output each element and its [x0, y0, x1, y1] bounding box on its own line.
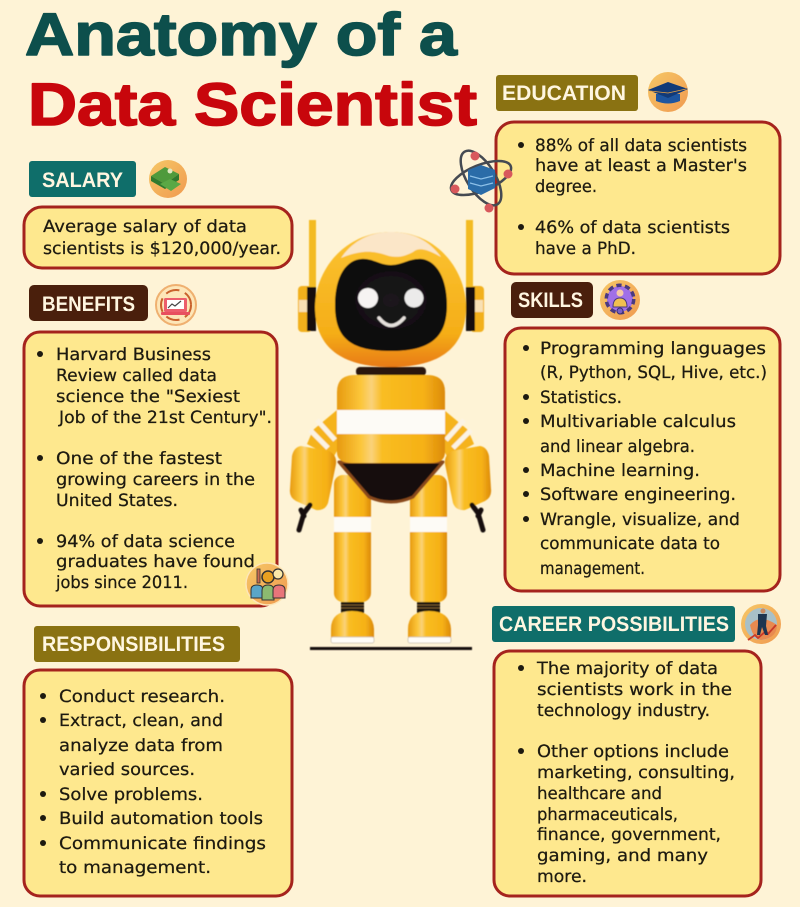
responsibilities text box: Solve problems.	[59, 785, 203, 805]
heading: benefits	[29, 285, 148, 321]
benefits text box: One of the fastest	[56, 449, 222, 469]
responsibilities text box: varied sources.	[59, 760, 195, 780]
heading: benefits: BENEFITS	[42, 293, 135, 316]
heading: education	[496, 75, 638, 111]
benefits text box: United States.	[56, 491, 178, 511]
career text box: technology industry.	[537, 701, 710, 721]
icon: team with ideas	[246, 563, 288, 605]
robot illustration	[290, 220, 491, 650]
career text box: The majority of data	[536, 659, 718, 679]
panel: salary	[24, 160, 292, 268]
panel: education	[446, 72, 780, 274]
responsibilities text box: Extract, clean, and	[59, 711, 223, 731]
salary text box: scientists is $120,000/year.	[43, 239, 281, 259]
title: Data Scientist	[28, 71, 477, 138]
education text box: 88% of all data scientists	[535, 136, 747, 156]
robot pelvis	[339, 462, 443, 502]
education text box: 46% of data scientists	[535, 218, 730, 238]
robot base line	[310, 647, 472, 650]
responsibilities text box	[24, 670, 292, 896]
title: Anatomy of a	[25, 1, 458, 68]
benefits text box: Job of the 21st Century".	[58, 408, 272, 428]
education text box: have at least a Master's	[535, 156, 747, 176]
career text box: pharmaceuticals,	[537, 805, 678, 825]
career text box	[494, 651, 761, 896]
icon: money stack	[149, 160, 187, 198]
heading: education: EDUCATION	[502, 82, 626, 105]
title	[25, 1, 477, 138]
salary text box	[24, 207, 292, 268]
robot head	[315, 232, 466, 367]
responsibilities text box: to management.	[59, 858, 211, 878]
heading: career possibilities	[492, 606, 735, 642]
career text box: healthcare and	[537, 784, 662, 804]
responsibilities text box: analyze data from	[59, 736, 223, 756]
benefits text box: Review called data	[56, 366, 217, 386]
responsibilities text box: Build automation tools	[59, 809, 263, 829]
salary text box: Average salary of data	[43, 217, 247, 237]
skills text box: Machine learning.	[540, 461, 700, 481]
panel: benefits	[24, 285, 288, 606]
skills text box: and linear algebra.	[540, 437, 695, 457]
heading: salary: SALARY	[42, 169, 123, 192]
heading: responsibilities: RESPONSIBILITIES	[42, 633, 225, 656]
robot arms	[290, 410, 491, 530]
skills text box: (R, Python, SQL, Hive, etc.)	[540, 363, 767, 383]
heading: skills	[511, 282, 593, 318]
heading: career possibilities: CAREER POSSIBILITIES	[499, 613, 729, 636]
icon: graduation cap	[648, 72, 688, 112]
icon: data atom	[446, 144, 516, 212]
panel: career possibilities	[492, 604, 781, 896]
icon: climbing career chart	[741, 604, 781, 644]
career text box: scientists work in the	[537, 680, 732, 700]
skills text box: communicate data to	[540, 534, 720, 554]
icon: growth laptop	[156, 285, 196, 325]
responsibilities text box: Communicate findings	[59, 834, 266, 854]
robot legs	[331, 475, 451, 643]
skills text box: Software engineering.	[540, 485, 736, 505]
skills text box: management.	[540, 559, 645, 579]
benefits text box	[24, 332, 277, 606]
panel: skills	[505, 280, 780, 591]
career text box: more.	[537, 867, 587, 887]
responsibilities text box: Conduct research.	[59, 687, 225, 707]
heading: salary	[29, 161, 136, 197]
heading: responsibilities	[34, 626, 240, 662]
skills text box: Wrangle, visualize, and	[540, 510, 740, 530]
education text box: degree.	[535, 177, 597, 197]
benefits text box: Harvard Business	[56, 345, 211, 365]
heading: skills: SKILLS	[518, 289, 583, 312]
education text box	[496, 122, 780, 274]
skills text box: Multivariable calculus	[540, 412, 736, 432]
robot torso	[337, 367, 445, 463]
skills text box	[505, 328, 780, 591]
panel: responsibilities	[24, 626, 292, 896]
skills text box: Statistics.	[540, 388, 622, 408]
benefits text box: jobs since 2011.	[55, 573, 188, 593]
career text box: finance, government,	[537, 825, 721, 845]
benefits text box: growing careers in the	[56, 470, 255, 490]
education text box: have a PhD.	[535, 239, 636, 259]
benefits text box: science the "Sexiest	[56, 387, 240, 407]
skills text box: Programming languages	[540, 339, 766, 359]
career text box: Other options include	[537, 742, 729, 762]
robot face	[335, 259, 447, 351]
benefits text box: 94% of data science	[56, 532, 235, 552]
robot antennas and ears	[298, 220, 484, 332]
icon: gear with person	[600, 280, 640, 320]
career text box: marketing, consulting,	[537, 763, 735, 783]
benefits text box: graduates have found	[56, 552, 255, 572]
career text box: gaming, and many	[537, 846, 708, 866]
